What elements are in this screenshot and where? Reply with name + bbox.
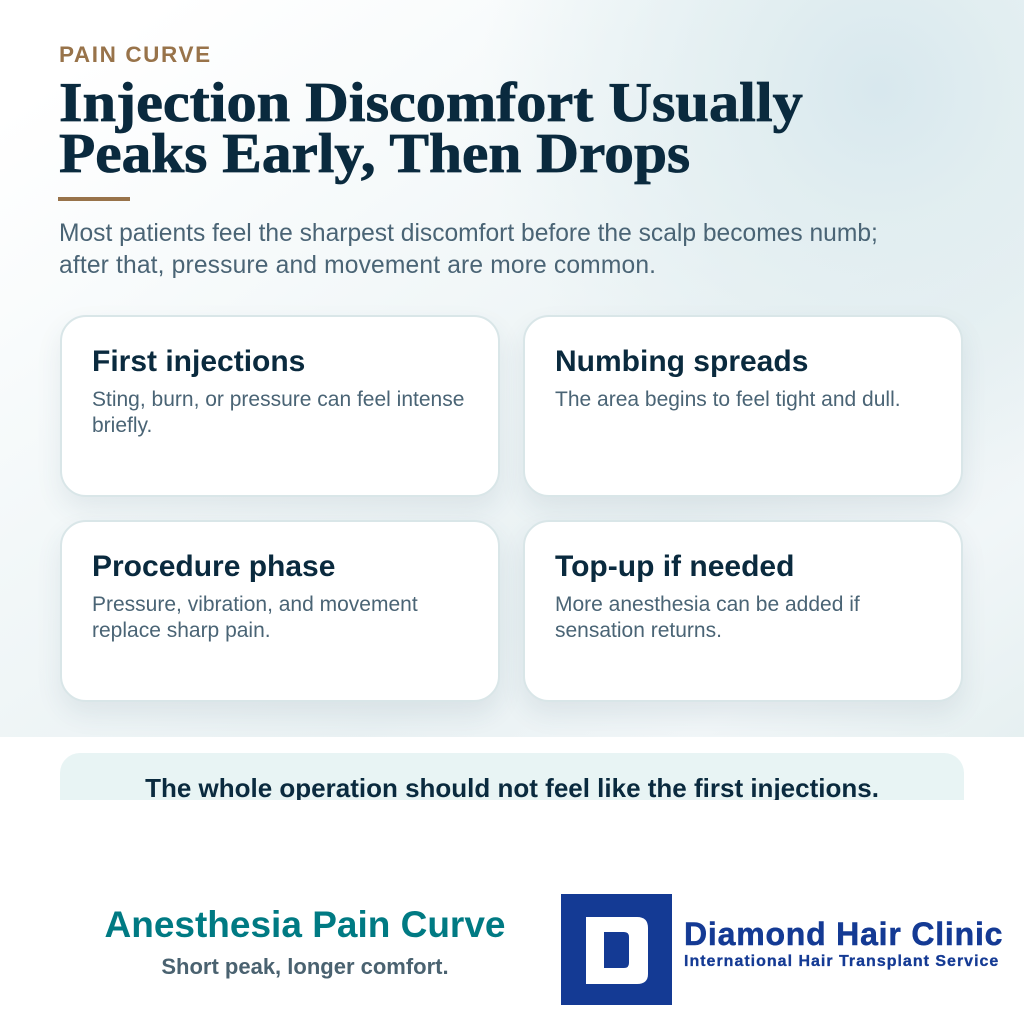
title accent rule: [58, 197, 130, 201]
eyebrow label: PAIN CURVE: [59, 42, 212, 67]
panel: hero background: [0, 0, 1024, 737]
footer title: Anesthesia Pain Curve: [104, 904, 505, 945]
card: first injections: [60, 315, 500, 497]
clinic tagline: International Hair Transplant Service: [684, 953, 999, 970]
card: numbing spreads: [523, 315, 963, 497]
card heading: Procedure phase: [92, 550, 335, 583]
card text: Pressure, vibration, and movement replace sharp pain.: [92, 593, 418, 642]
card heading: First injections: [92, 345, 305, 378]
footer tagline: Short peak, longer comfort.: [161, 954, 449, 979]
title: Peaks Early, Then Drops: [59, 122, 690, 184]
title: [59, 72, 803, 184]
subtitle: after that, pressure and movement are more common.: [59, 252, 656, 279]
subtitle: [59, 220, 878, 279]
card: procedure phase: [60, 520, 500, 702]
card text: Sting, burn, or pressure can feel intense briefly.: [92, 388, 464, 436]
title: Injection Discomfort Usually: [59, 72, 803, 134]
card heading: Top-up if needed: [555, 550, 794, 583]
clinic name: Diamond Hair Clinic: [684, 916, 1003, 952]
callout: key message: [60, 753, 964, 800]
card: top-up if needed: [523, 520, 963, 702]
icon: clinic logo mark: [561, 894, 672, 1005]
card text: The area begins to feel tight and dull.: [555, 388, 901, 411]
card text: More anesthesia can be added if sensation returns.: [555, 593, 860, 642]
subtitle: Most patients feel the sharpest discomfort before the scalp becomes numb;: [59, 220, 878, 247]
card heading: Numbing spreads: [555, 345, 808, 378]
